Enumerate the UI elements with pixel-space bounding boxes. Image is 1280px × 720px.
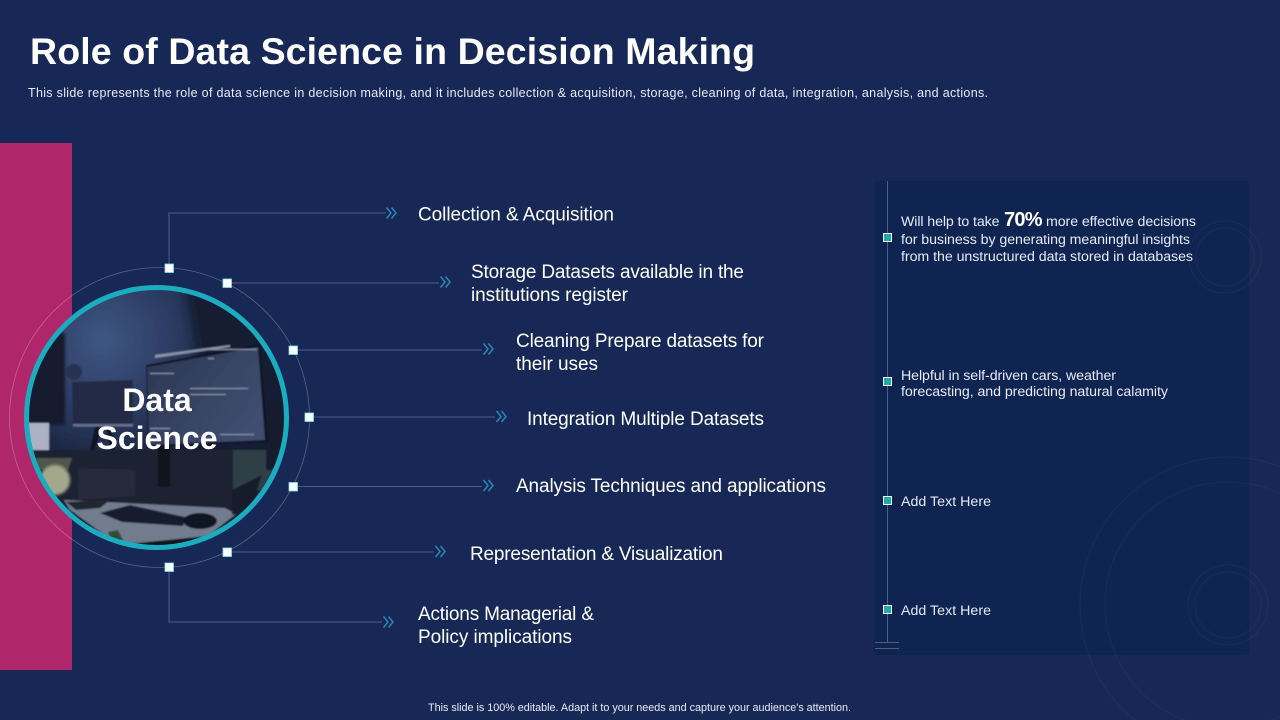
label: actions: Policy implications [418,627,572,648]
label: actions [418,604,594,648]
pink side band [0,143,72,670]
benefit 1: 70% [1004,209,1043,231]
label: representation: Representation & Visualization [470,544,723,565]
label: storage: Storage Datasets available in the [471,262,744,283]
benefit 2: forecasting, and predicting natural calamity [901,384,1169,400]
connector: cleaning [289,344,493,354]
label: collection: Collection & Acquisition [418,204,614,226]
panel: benefits [874,181,1280,720]
benefit 1: for business by generating meaningful insights [901,232,1190,248]
label: analysis: Analysis Techniques and applications [516,476,826,497]
circle heading: Data [122,382,192,418]
label: cleaning: their uses [516,354,598,375]
benefit 2 [884,368,1169,400]
connector: analysis [289,480,493,491]
benefit 1: more effective decisions [1046,214,1196,230]
label: cleaning [516,331,765,375]
label: cleaning: Cleaning Prepare datasets for [516,331,765,352]
title: Role of Data Science in Decision Making [30,30,755,72]
benefit 1: Will help to take [901,214,1000,230]
footer note: This slide is 100% editable. Adapt it to your needs and capture your audience's attention. [428,702,851,714]
label: storage [471,262,744,306]
outer orbit ring [10,268,310,568]
connector: integration [305,411,506,422]
connector: actions [165,563,393,628]
benefit 4: Add Text Here [901,603,991,619]
label: integration: Integration Multiple Datasets [527,409,764,430]
subtitle: This slide represents the role of data science in decision making, and it includes collection & acquisition, storage, cleaning of data, integration, analysis, and actions. [28,86,988,100]
connector: collection [165,208,396,272]
data science photo circle [24,285,289,550]
circle heading [97,382,217,456]
connector: representation [223,546,445,557]
connector: storage [223,276,450,288]
label: actions: Actions Managerial & [418,604,594,625]
benefit 3: Add Text Here [901,494,991,510]
benefit 1 [884,209,1196,265]
benefit 1: from the unstructured data stored in databases [901,249,1193,265]
panel timeline line [875,181,899,648]
circle heading: Science [97,420,217,456]
label: storage: institutions register [471,285,629,306]
benefit 2: Helpful in self-driven cars, weather [901,368,1116,384]
